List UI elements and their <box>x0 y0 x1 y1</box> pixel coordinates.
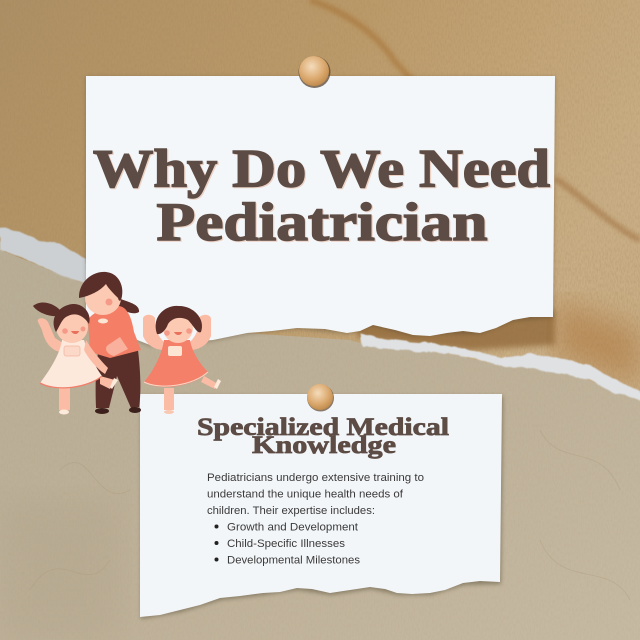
body text <box>207 472 424 566</box>
girl in cream dress <box>33 303 118 414</box>
torn white edge: left <box>0 228 90 284</box>
panel: content note shadow <box>141 396 503 619</box>
background: upper burlap paper <box>0 0 640 410</box>
title: Why Do We Need <box>94 140 551 200</box>
title: Why Do We Need <box>93 138 550 198</box>
girl in coral dress <box>143 306 221 414</box>
panel: content note <box>140 394 502 617</box>
title: Pediatrician <box>156 192 488 252</box>
illustration: mother and two children <box>33 272 221 414</box>
heading: Specialized Medical Knowledge: Specialized Medical <box>197 414 449 441</box>
body text: Growth and Development <box>227 522 358 534</box>
title: Pediatrician <box>158 193 489 253</box>
panel: title note <box>86 76 555 345</box>
mother <box>79 272 141 414</box>
icon: top pin <box>298 56 330 88</box>
body text: Child-Specific Illnesses <box>227 538 346 550</box>
icon: bottom pin <box>307 384 334 412</box>
body text: understand the unique health needs of <box>207 488 404 500</box>
background: lower beige paper with torn edge <box>0 250 640 640</box>
torn white edge: right <box>360 333 640 400</box>
body text: children. Their expertise includes: <box>207 505 375 517</box>
body text: Pediatricians undergo extensive training to <box>207 472 424 484</box>
heading: Specialized Medical Knowledge: Knowledge <box>252 432 396 459</box>
body text: Developmental Milestones <box>227 554 361 566</box>
title <box>93 138 551 253</box>
heading: Specialized Medical Knowledge <box>197 414 449 459</box>
panel: title note shadow <box>86 77 555 346</box>
